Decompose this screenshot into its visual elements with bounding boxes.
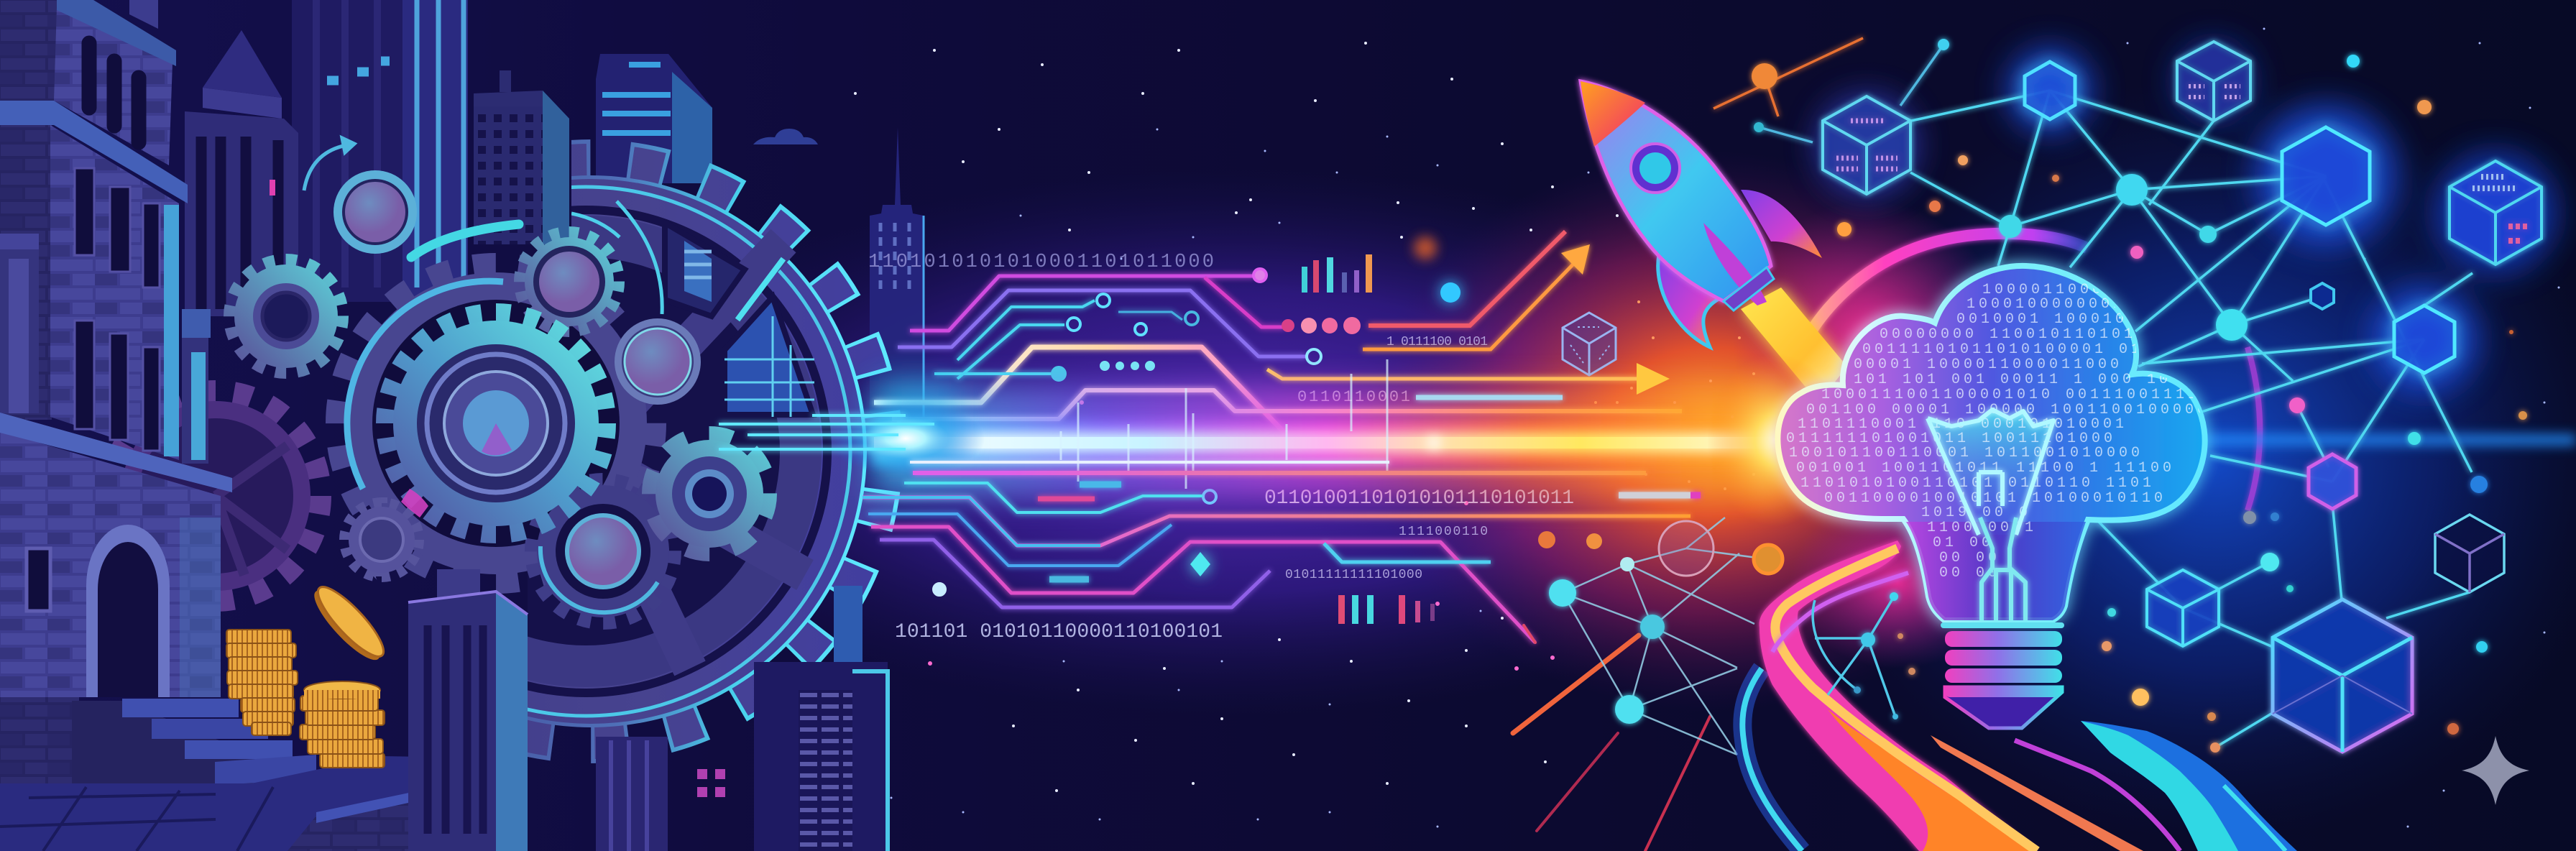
foreground building with stripes (408, 569, 528, 851)
red rays (1513, 625, 1710, 851)
pink ribbon (1760, 540, 2037, 851)
yellow stripe (1775, 548, 2037, 851)
binary pattern (1787, 283, 2200, 576)
binary pattern: 0011000010010101 10100010110 (1824, 490, 2166, 507)
binary pattern: 01 00 (1933, 535, 1994, 551)
small gear top left (230, 260, 342, 372)
cornice (0, 101, 188, 203)
binary pattern: 1019 00 0 (1921, 505, 2031, 521)
striped office building (596, 54, 712, 183)
filament funnel fill (1928, 410, 2053, 535)
binary text top: 1101010101010001101011000 (868, 252, 1214, 273)
small data cube (1563, 313, 1616, 375)
panel: network right (1714, 38, 2576, 753)
hexagon top (2025, 62, 2075, 119)
center fin (1703, 223, 1767, 305)
icon: cloud (753, 129, 818, 144)
arc right (2248, 347, 2260, 510)
binary pattern: 001001 1001101011 11100 1 11100 (1796, 460, 2175, 477)
steeple building (185, 30, 298, 316)
panel: classic stone building (0, 0, 477, 851)
thin orange ribbon (1931, 735, 2143, 851)
circuit traces upper (874, 276, 1682, 433)
window (1631, 144, 1680, 193)
binary pattern: 1100 0001 (1927, 520, 2037, 536)
blue cube (2147, 570, 2219, 646)
lower small gear (345, 503, 418, 576)
panel: skyline behind the gears (185, 0, 712, 316)
glowing particles (1752, 39, 2527, 753)
coin stack left (226, 630, 298, 735)
small binary texts (1285, 335, 1488, 582)
right fin (1741, 190, 1822, 258)
cyan arc stroke (411, 224, 519, 257)
binary text bottom: 101101 01010110000110100101 (895, 621, 1223, 643)
binary pattern: 001100 00001 100000 1001100100000 (1806, 402, 2209, 418)
distant city on the right of the machinery (753, 127, 924, 446)
blue flare (2156, 434, 2576, 446)
nodes (1538, 521, 1782, 724)
beam (827, 359, 1780, 496)
filament (1928, 410, 2053, 620)
door arch (86, 525, 170, 697)
nodes (1999, 174, 2488, 571)
data cube left (1823, 96, 1910, 194)
lower gear with disc (533, 481, 673, 622)
arc above bulb (1802, 234, 2087, 347)
stairs (72, 699, 316, 787)
arc arrow (304, 138, 354, 190)
data cube right (2450, 161, 2542, 264)
small bulb-side network (1813, 597, 1895, 717)
big glass cube (2273, 599, 2412, 752)
binary pattern: 100101100110001 1011001010000 (1789, 445, 2143, 461)
nose cone (1581, 81, 1645, 147)
bar chart top (1302, 254, 1372, 293)
binary text middle: 01101001101010101110101011 (1264, 487, 1574, 510)
right disc (615, 318, 701, 405)
small binary texts: 1 0111100 0101 (1386, 335, 1488, 349)
door (98, 542, 158, 697)
upper right gear (520, 233, 618, 331)
binary pattern: 1101010100110101 0110110 1101 (1800, 475, 2155, 492)
panel: rocket (1581, 81, 1847, 402)
icon: sparkle watermark (2462, 736, 2529, 805)
coin stack right (300, 681, 385, 768)
thin cyan ribbon (1742, 668, 1802, 851)
binary pattern: 00111101011010100001 0110011 (1862, 341, 2204, 358)
circuit nodes (934, 269, 1321, 595)
hexagon large (2282, 127, 2370, 225)
lower middle building (596, 737, 668, 851)
binary pattern: 1101110001 110 000101010001 (1798, 416, 2128, 433)
binary pattern: 0010001 1000100 (1956, 311, 2140, 328)
gear spokes (631, 229, 814, 676)
binary pattern: 1000100000001 (1966, 296, 2125, 313)
middle storey (0, 125, 179, 460)
flying coin (306, 579, 392, 668)
cloud outline glow (1777, 266, 2205, 620)
small binary texts: 01011111111101000 (1285, 568, 1422, 582)
small binary texts: 1111000110 (1399, 525, 1488, 539)
binary pattern: 00 00 (1939, 565, 2000, 581)
lower bulb tint (1906, 522, 2086, 620)
bulb base (1941, 622, 2064, 728)
dot row pink (1282, 317, 1361, 334)
flame (1741, 288, 1847, 402)
orange burst at cloud edge (1707, 354, 1844, 526)
bar chart bottom (1338, 595, 1435, 624)
wire cube (2435, 515, 2504, 592)
lower wall (0, 431, 221, 783)
beam side lines (719, 397, 1701, 579)
thin cyan accent (2224, 786, 2286, 851)
upper window in gear (665, 223, 745, 316)
panel: coin stacks (226, 579, 392, 768)
links (1714, 38, 2472, 748)
window block building (474, 70, 569, 244)
top disc (334, 170, 417, 254)
right small gear (650, 435, 768, 553)
glowing blobs (1414, 236, 1460, 303)
ledge (0, 756, 477, 851)
main central gear (386, 313, 606, 533)
starfield (855, 29, 2559, 827)
cornice lower (0, 413, 232, 492)
violet strand (1772, 573, 1908, 652)
lower right city block (697, 586, 888, 851)
upper storey (0, 0, 176, 165)
tower with stripes (292, 0, 468, 302)
rocket body (1581, 81, 1771, 301)
small binary texts: 0110110001 (1297, 388, 1410, 406)
left fin (1658, 255, 1720, 347)
data cube top (2177, 42, 2250, 121)
thin pink ribbon (2015, 740, 2180, 851)
circuit traces lower (862, 483, 1690, 643)
panel: cloud light bulb (1777, 266, 2261, 728)
large mid gear ring (336, 264, 656, 583)
side pilaster (182, 309, 211, 464)
network glows (1816, 42, 2557, 393)
binary pattern: 00 00 (1939, 550, 2000, 566)
big ring gear (528, 139, 901, 763)
binary pattern: 1000111001100001010 0011100111120001 (1821, 387, 2261, 403)
hexagon right (2394, 305, 2455, 373)
blue ribbon (2081, 721, 2297, 851)
dot row cyan (1100, 361, 1155, 371)
panel: ribbons (1742, 234, 2297, 851)
lit window in gear (724, 297, 813, 415)
binary pattern: 10000110001 (1982, 282, 2117, 298)
hexagon pink (2309, 454, 2356, 509)
dark purple gear behind the building (111, 392, 320, 600)
hexagon small (2311, 283, 2334, 309)
binary pattern: 011111101001011 10011101000 (1786, 431, 2116, 447)
binary pattern: 00001 1000011000011000 00000 01 (1854, 356, 2232, 373)
yellow arrow (1637, 363, 1670, 395)
binary pattern: 101 101 001 00011 1 000 10 10010 (1854, 372, 2245, 388)
binary pattern: 00000000 1100101101011 00 (1880, 326, 2185, 343)
growth arrows (1363, 231, 1590, 349)
links (1563, 518, 1768, 755)
cyan ribbon (2081, 721, 2238, 851)
diamond node (1190, 552, 1210, 576)
panel: data stream (719, 231, 1780, 643)
orange ribbon (1828, 709, 2037, 851)
panel: network lower left (1513, 518, 1782, 851)
engine (1724, 267, 1774, 310)
